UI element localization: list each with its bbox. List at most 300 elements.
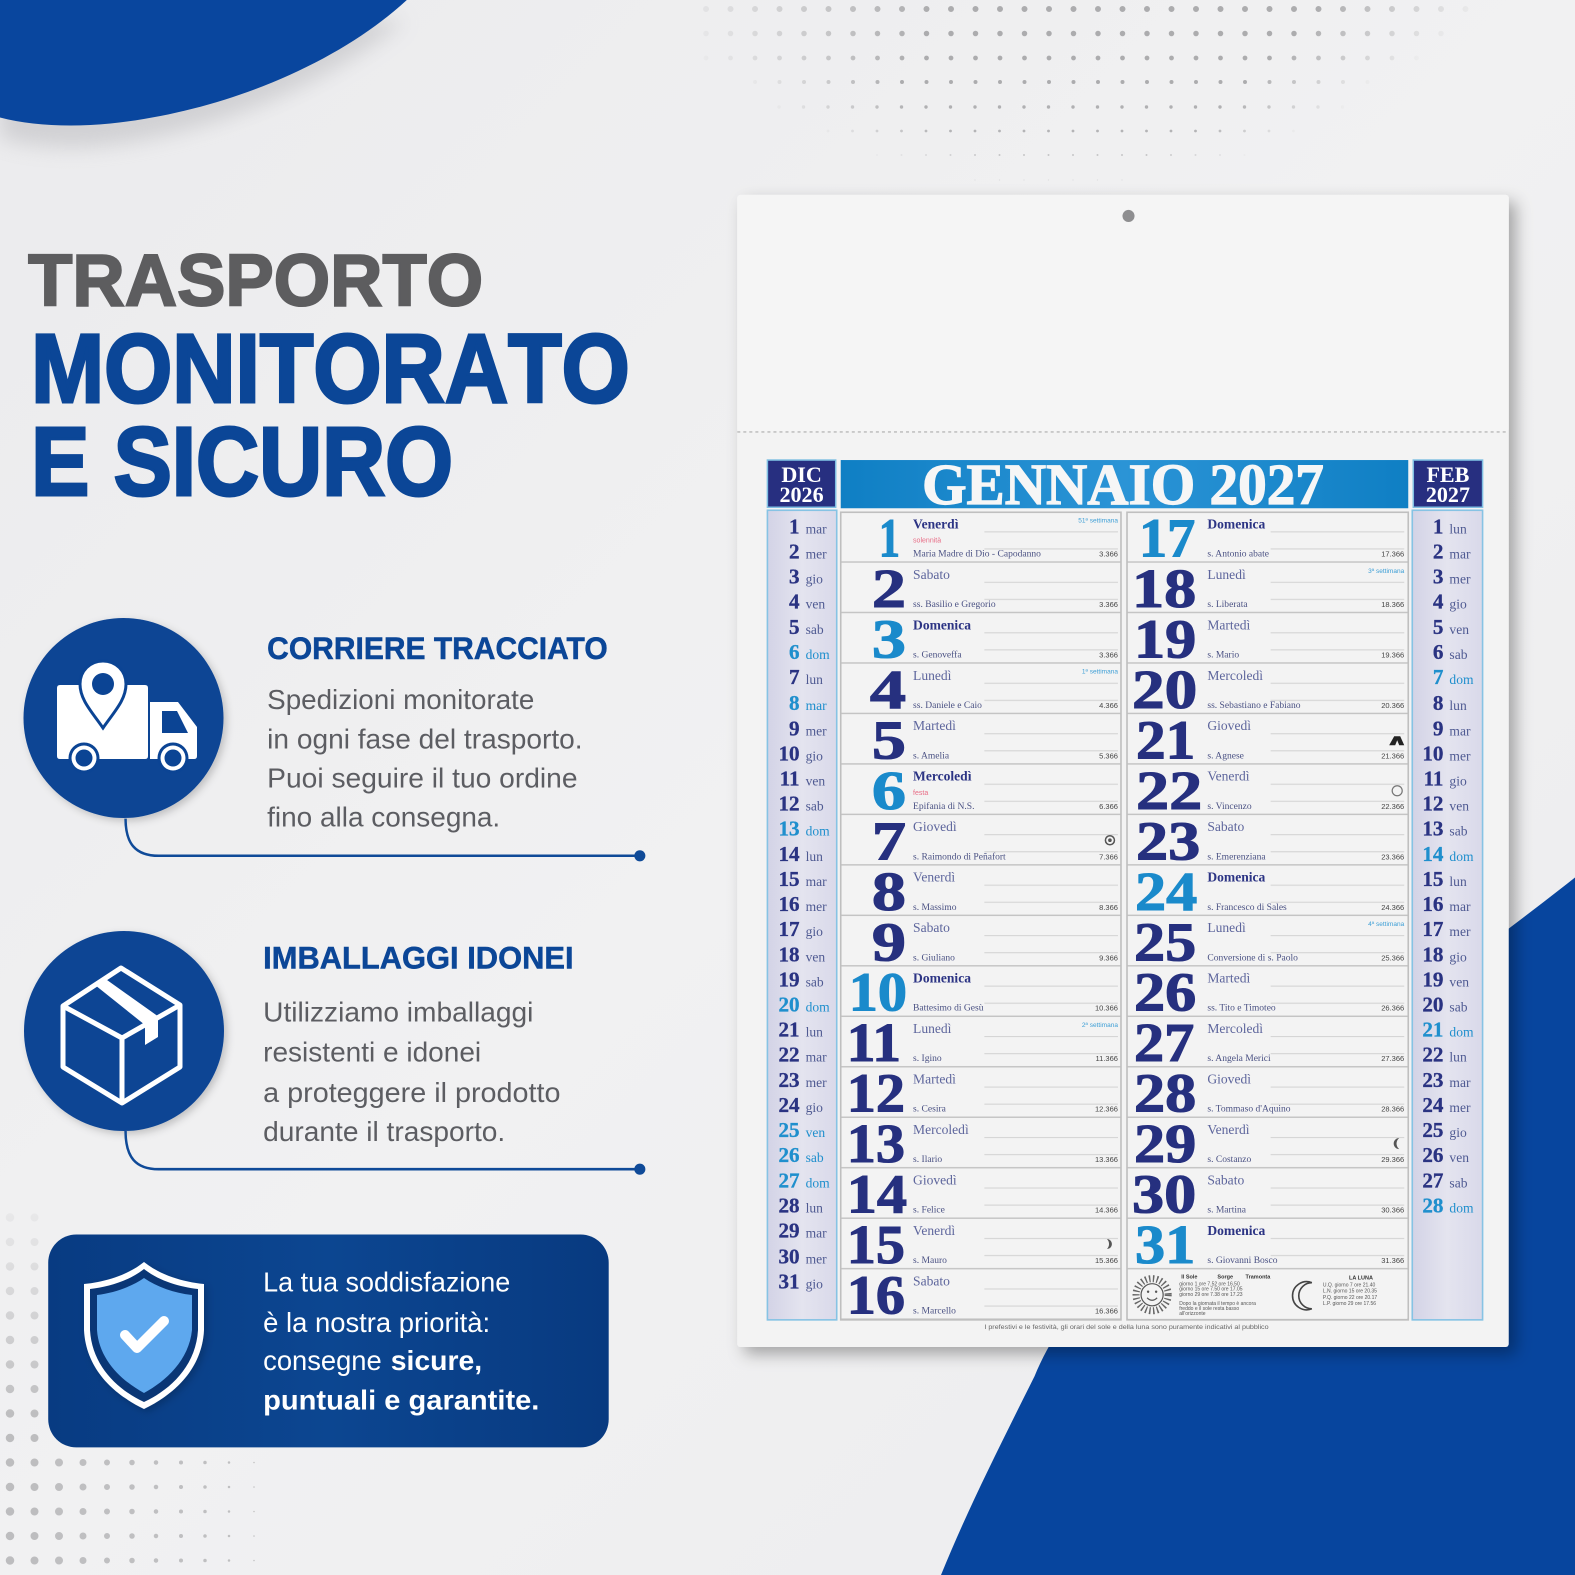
day column 17 to 31: Giovedì: [1207, 718, 1251, 733]
day column 17 to 31: 21.366: [1381, 751, 1404, 760]
day column 17 to 31: Mercoledì: [1207, 668, 1263, 683]
day column 1 to 16: 7: [872, 810, 906, 871]
text block: satisfaction message: è la nostra priorità:: [263, 1307, 490, 1338]
day column 1 to 16: s. Cesira: [913, 1104, 947, 1115]
sidebar: february 2027: 7: [1433, 665, 1444, 689]
sidebar: february 2027: ven: [1449, 622, 1469, 637]
day column 1 to 16: Lunedì: [913, 668, 952, 683]
text block: satisfaction message: sicure,: [391, 1345, 482, 1376]
sidebar: december 2026: 5: [789, 615, 800, 639]
day column 17 to 31: Martedì: [1207, 971, 1250, 986]
sun table: Dopo la giornata il tempo è ancora: [1179, 1301, 1256, 1307]
day column 17 to 31: Venerdì: [1207, 1122, 1250, 1137]
day column 17 to 31: [1127, 507, 1408, 1320]
day column 17 to 31: 26.366: [1381, 1004, 1404, 1013]
sidebar: february 2027: 1: [1433, 514, 1443, 538]
icon: truck with location pin: [24, 618, 224, 818]
connector line 1: [126, 819, 645, 861]
day column 17 to 31: Conversione di s. Paolo: [1207, 952, 1298, 963]
day column 1 to 16: s. Raimondo di Peñafort: [913, 851, 1006, 862]
sidebar: december 2026: ven: [806, 1125, 825, 1140]
sidebar: december 2026: sab: [806, 622, 824, 637]
day column 17 to 31: Lunedì: [1207, 567, 1246, 582]
sidebar: december 2026: 12: [778, 792, 800, 816]
sidebar: february 2027: sab: [1449, 1175, 1468, 1190]
sidebar: february 2027: dom: [1449, 1200, 1474, 1215]
sidebar: december 2026: mer: [806, 723, 827, 738]
sidebar: december 2026: 3: [789, 565, 800, 589]
text block: corriere tracciato: Puoi seguire il tuo ordine: [267, 762, 578, 793]
title: TRASPORTO: [28, 239, 483, 321]
day column 17 to 31: s. Emerenziana: [1207, 851, 1266, 862]
day column 1 to 16: 1ª settimana: [1082, 669, 1118, 676]
sidebar: february 2027: mar: [1449, 1075, 1471, 1090]
day column 1 to 16: 7.366: [1099, 852, 1118, 861]
day column 17 to 31: 18: [1132, 558, 1196, 619]
sidebar: february 2027: sab: [1449, 999, 1468, 1014]
day column 17 to 31: 20.366: [1381, 701, 1404, 710]
sidebar: february 2027: mar: [1449, 546, 1471, 561]
sidebar: december 2026: ven: [806, 773, 825, 788]
sidebar: february 2027: ven: [1449, 1150, 1469, 1165]
previous month label: 2026: [779, 482, 824, 507]
day column 1 to 16: Venerdì: [913, 516, 959, 531]
sidebar: february 2027: 22: [1422, 1043, 1443, 1067]
day column 17 to 31: 3ª settimana: [1368, 568, 1405, 575]
day column 1 to 16: 12: [847, 1063, 905, 1124]
day column 1 to 16: Battesimo di Gesù: [913, 1003, 984, 1014]
sidebar: february 2027: lun: [1449, 874, 1467, 889]
moon table: LA LUNA: [1349, 1276, 1373, 1282]
sidebar: december 2026: 20: [778, 992, 800, 1016]
sun table: Sorge: [1217, 1275, 1233, 1281]
sidebar: february 2027: dom: [1449, 672, 1474, 687]
panel: satisfaction callout: [48, 1234, 609, 1447]
sidebar: february 2027: mer: [1449, 1100, 1471, 1115]
day column 1 to 16: Mercoledì: [913, 1122, 969, 1137]
moon table: P.Q. giorno 22 ore 20.17: [1323, 1295, 1377, 1301]
day column 17 to 31: Mercoledì: [1207, 1021, 1263, 1036]
sidebar: february 2027: 21: [1422, 1018, 1443, 1042]
day column 1 to 16: 2: [872, 558, 906, 619]
moon table: U.Q. giorno 7 ore 21.40: [1323, 1283, 1376, 1289]
sidebar: december 2026: mar: [806, 1050, 827, 1065]
day column 17 to 31: 24.366: [1381, 903, 1404, 912]
day column 1 to 16: s. Marcello: [913, 1306, 956, 1317]
sidebar: february 2027: 4: [1433, 590, 1444, 614]
sidebar: december 2026: mar: [806, 874, 827, 889]
sidebar: december 2026: 13: [778, 817, 800, 841]
day column 1 to 16: Giovedì: [913, 819, 957, 834]
sidebar: february 2027: ven: [1449, 974, 1469, 989]
sidebar: december 2026: [767, 510, 837, 1320]
title: MONITORATO: [31, 314, 630, 423]
day column 17 to 31: 4ª settimana: [1368, 921, 1405, 928]
icon: shield with check: [84, 1262, 204, 1409]
sidebar: february 2027: sab: [1449, 824, 1468, 839]
day column 1 to 16: s. Ilario: [913, 1154, 942, 1165]
day column 17 to 31: 23: [1136, 810, 1200, 871]
sidebar: december 2026: 11: [780, 766, 800, 790]
day column 17 to 31: Martedì: [1207, 617, 1250, 632]
day column 1 to 16: Venerdì: [913, 1223, 955, 1238]
day column 1 to 16: s. Massimo: [913, 902, 957, 913]
day column 17 to 31: 22: [1136, 760, 1202, 821]
day column 1 to 16: Lunedì: [913, 1021, 952, 1036]
title: [28, 239, 630, 516]
sidebar: december 2026: 18: [778, 942, 800, 966]
day column 17 to 31: 28: [1134, 1063, 1196, 1124]
day column 1 to 16: solennità: [913, 537, 941, 544]
day column 17 to 31: 31: [1135, 1214, 1195, 1275]
day column 17 to 31: 30.366: [1381, 1206, 1404, 1215]
day column 17 to 31: s. Vincenzo: [1207, 801, 1252, 812]
halftone dots top right: [706, 9, 1470, 180]
sidebar: february 2027: 24: [1422, 1093, 1444, 1117]
sidebar: december 2026: gio: [806, 924, 823, 939]
day column 1 to 16: 16: [847, 1265, 905, 1326]
day column 17 to 31: 20: [1132, 659, 1197, 720]
sidebar: december 2026: 14: [778, 842, 800, 866]
day column 17 to 31: Domenica: [1207, 870, 1266, 885]
text block: imballaggi idonei: resistenti e idonei: [263, 1037, 481, 1068]
day column 17 to 31: 30: [1132, 1164, 1196, 1225]
day column 17 to 31: s. Martina: [1207, 1205, 1247, 1216]
day column 17 to 31: s. Antonio abate: [1207, 548, 1269, 559]
text block: imballaggi idonei: Utilizziamo imballaggi: [263, 997, 533, 1028]
sidebar: february 2027: 25: [1422, 1118, 1443, 1142]
icon: parcel box: [24, 931, 224, 1131]
sidebar: february 2027: 14: [1422, 842, 1444, 866]
title: E SICURO: [31, 407, 453, 516]
sidebar: february 2027: lun: [1449, 521, 1467, 536]
text block: imballaggi idonei: a proteggere il prodotto: [263, 1077, 560, 1108]
sidebar: december 2026: ven: [806, 597, 825, 612]
sidebar: february 2027: 11: [1423, 766, 1443, 790]
day column 17 to 31: 29.366: [1381, 1155, 1404, 1164]
sidebar: december 2026: dom: [806, 999, 830, 1014]
day column 17 to 31: Sabato: [1207, 819, 1244, 834]
text block: corriere tracciato: Spedizioni monitorate: [267, 684, 534, 715]
sidebar: february 2027: 23: [1422, 1068, 1443, 1092]
sidebar: december 2026: gio: [806, 1277, 823, 1292]
day column 1 to 16: 13.366: [1095, 1155, 1118, 1164]
sidebar: december 2026: 6: [789, 640, 800, 664]
sidebar: february 2027: mer: [1449, 924, 1471, 939]
day column 1 to 16: s. Giuliano: [913, 952, 955, 963]
sidebar: december 2026: mer: [806, 1075, 827, 1090]
moon table: L.N. giorno 15 ore 20.35: [1323, 1289, 1377, 1295]
sidebar: december 2026: 2: [789, 539, 800, 563]
sidebar: december 2026: 27: [778, 1168, 800, 1192]
sidebar: february 2027: mar: [1449, 899, 1471, 914]
heading: imballaggi idonei: IMBALLAGGI IDONEI: [263, 940, 574, 975]
day column 1 to 16: 1: [879, 507, 900, 568]
sidebar: december 2026: mer: [806, 1252, 827, 1267]
sidebar: december 2026: mer: [806, 546, 827, 561]
sidebar: december 2026: sab: [806, 974, 824, 989]
sidebar: february 2027: 18: [1422, 942, 1443, 966]
sidebar: december 2026: 7: [789, 665, 800, 689]
day column 1 to 16: 6.366: [1099, 802, 1118, 811]
sidebar: december 2026: 8: [789, 691, 800, 715]
day column 17 to 31: 18.366: [1381, 600, 1404, 609]
day column 1 to 16: 14: [847, 1164, 907, 1225]
day column 1 to 16: Martedì: [913, 1072, 956, 1087]
text block: satisfaction message: [263, 1267, 539, 1415]
day column 17 to 31: Sabato: [1207, 1173, 1244, 1188]
day column 1 to 16: Mercoledì: [913, 769, 972, 784]
day column 1 to 16: 5: [872, 709, 906, 770]
sidebar: february 2027: 6: [1433, 640, 1443, 664]
sidebar: february 2027: gio: [1449, 597, 1467, 612]
day column 17 to 31: 19.366: [1381, 650, 1404, 659]
day column 17 to 31: 23.366: [1381, 852, 1404, 861]
text block: imballaggi idonei: [263, 997, 560, 1147]
sidebar: february 2027: [1412, 510, 1483, 1320]
day column 1 to 16: 8.366: [1099, 903, 1118, 912]
sidebar: december 2026: 26: [778, 1143, 800, 1167]
text block: corriere tracciato: in ogni fase del trasporto.: [267, 723, 583, 754]
sidebar: february 2027: dom: [1449, 849, 1474, 864]
sidebar: december 2026: gio: [806, 1100, 823, 1115]
day column 1 to 16: Epifania di N.S.: [913, 801, 974, 812]
sidebar: december 2026: 29: [778, 1218, 800, 1242]
day column 1 to 16: 6: [872, 760, 906, 821]
text block: corriere tracciato: fino alla consegna.: [267, 802, 500, 833]
day column 1 to 16: 5.366: [1099, 751, 1118, 760]
day column 17 to 31: 22.366: [1381, 802, 1404, 811]
day column 1 to 16: s. Mauro: [913, 1255, 947, 1266]
sidebar: december 2026: 9: [789, 716, 800, 740]
sidebar: december 2026: 21: [778, 1018, 800, 1042]
decorative blue shape top left: [0, 0, 407, 126]
day column 1 to 16: festa: [913, 790, 928, 797]
next month label: 2027: [1426, 482, 1470, 507]
sidebar: february 2027: lun: [1449, 698, 1467, 713]
day column 1 to 16: 3.366: [1099, 600, 1118, 609]
sidebar: february 2027: 19: [1422, 967, 1443, 991]
day column 17 to 31: s. Costanzo: [1207, 1154, 1252, 1165]
text block: imballaggi idonei: durante il trasporto.: [263, 1116, 505, 1147]
day column 17 to 31: s. Tommaso d'Aquino: [1207, 1104, 1291, 1115]
sidebar: december 2026: 31: [778, 1270, 800, 1294]
sidebar: february 2027: 9: [1433, 716, 1443, 740]
day column 17 to 31: 27.366: [1381, 1054, 1404, 1063]
sidebar: february 2027: mer: [1449, 572, 1471, 587]
connector line 2: [126, 1131, 645, 1175]
sidebar: february 2027: gio: [1449, 773, 1467, 788]
day column 1 to 16: ss. Daniele e Caio: [913, 700, 982, 711]
day column 17 to 31: 21: [1136, 709, 1195, 770]
next month label: FEB: [1426, 462, 1470, 487]
day column 1 to 16: Martedì: [913, 718, 956, 733]
sidebar: february 2027: 26: [1422, 1143, 1443, 1167]
day column 17 to 31: 25.366: [1381, 953, 1404, 962]
day column 1 to 16: Venerdì: [913, 870, 955, 885]
sidebar: december 2026: 23: [778, 1068, 800, 1092]
sidebar: december 2026: 24: [778, 1093, 800, 1117]
day column 17 to 31: 27: [1134, 1012, 1194, 1073]
sidebar: december 2026: gio: [806, 572, 823, 587]
sidebar: december 2026: 19: [778, 967, 800, 991]
calendar footer note: I prefestivi e le festività, gli orari del sole e della luna sono puramente indicativi al pubblico: [984, 1325, 1269, 1331]
day column 1 to 16: 3: [872, 608, 906, 669]
sidebar: february 2027: 17: [1422, 917, 1444, 941]
sun table: all'orizzonte: [1179, 1311, 1206, 1317]
day column 1 to 16: 2ª settimana: [1082, 1022, 1118, 1029]
sun and moon almanac: [1128, 1270, 1407, 1319]
previous month label: DIC: [781, 462, 822, 487]
sidebar: february 2027: 13: [1422, 817, 1443, 841]
sidebar: december 2026: lun: [806, 672, 823, 687]
day column 1 to 16: Sabato: [913, 920, 950, 935]
day column 1 to 16: 15: [847, 1214, 905, 1275]
sun table: Il Sole: [1181, 1275, 1197, 1281]
day column 1 to 16: 11: [847, 1012, 901, 1073]
day column 17 to 31: s. Mario: [1207, 649, 1239, 660]
sidebar: december 2026: 17: [778, 917, 800, 941]
sidebar: december 2026: 22: [778, 1043, 800, 1067]
sidebar: december 2026: dom: [806, 647, 830, 662]
day column 1 to 16: s. Genoveffa: [913, 649, 962, 660]
calendar title bar: GENNAIO 2027: [922, 452, 1324, 517]
day column 17 to 31: s. Liberata: [1207, 599, 1248, 610]
day column 1 to 16: 10: [849, 962, 907, 1023]
sidebar: february 2027: 15: [1422, 867, 1443, 891]
day column 1 to 16: 9.366: [1099, 953, 1118, 962]
sidebar: february 2027: 10: [1422, 741, 1443, 765]
sidebar: february 2027: 8: [1433, 691, 1443, 715]
day column 1 to 16: s. Amelia: [913, 750, 950, 761]
sidebar: february 2027: 28: [1422, 1193, 1443, 1217]
next month label: [1413, 460, 1483, 507]
sidebar: february 2027: 5: [1433, 615, 1443, 639]
day column 17 to 31: 24: [1135, 861, 1197, 922]
decorative blue shape bottom right: [938, 872, 1575, 1575]
sidebar: february 2027: ven: [1449, 799, 1469, 814]
icon: sun: [1136, 1279, 1168, 1311]
day column 17 to 31: 19: [1134, 608, 1196, 669]
sidebar: february 2027: 2: [1433, 539, 1443, 563]
sidebar: february 2027: 12: [1422, 792, 1443, 816]
sidebar: december 2026: lun: [806, 1025, 823, 1040]
sidebar: december 2026: dom: [806, 824, 830, 839]
sidebar: december 2026: sab: [806, 799, 824, 814]
sidebar: december 2026: mar: [806, 521, 827, 536]
day column 1 to 16: s. Igino: [913, 1053, 942, 1064]
day column 17 to 31: 29: [1134, 1113, 1196, 1174]
day column 1 to 16: ss. Basilio e Gregorio: [913, 599, 996, 610]
day column 1 to 16: 4.366: [1099, 701, 1118, 710]
heading: corriere tracciato: CORRIERE TRACCIATO: [267, 631, 608, 666]
sidebar: february 2027: gio: [1449, 1125, 1467, 1140]
sidebar: december 2026: ven: [806, 949, 825, 964]
day column 17 to 31: s. Francesco di Sales: [1207, 902, 1287, 913]
moon table: [1323, 1276, 1377, 1307]
text block: corriere tracciato: [267, 684, 583, 833]
sidebar: february 2027: 16: [1422, 892, 1443, 916]
text block: satisfaction message: consegne: [263, 1345, 382, 1376]
day column 17 to 31: 31.366: [1381, 1256, 1404, 1265]
icon: moon: [1293, 1282, 1312, 1310]
day column 17 to 31: s. Giovanni Bosco: [1207, 1255, 1278, 1266]
sidebar: february 2027: 27: [1422, 1168, 1444, 1192]
halftone dots bottom left: [10, 1218, 254, 1561]
sidebar: december 2026: dom: [806, 1175, 830, 1190]
day column 17 to 31: 17: [1139, 507, 1195, 568]
panel: wall calendar: [737, 195, 1509, 1347]
sidebar: december 2026: sab: [806, 1150, 824, 1165]
day column 1 to 16: 10.366: [1095, 1004, 1118, 1013]
sidebar: december 2026: 1: [789, 514, 800, 538]
day column 1 to 16: Domenica: [913, 617, 971, 632]
day column 1 to 16: 13: [847, 1113, 905, 1174]
day column 1 to 16: 16.366: [1095, 1307, 1118, 1316]
sidebar: december 2026: lun: [806, 1200, 823, 1215]
sun table: giorno 29 ore 7.38 ore 17.23: [1179, 1292, 1243, 1298]
day column 17 to 31: Lunedì: [1207, 920, 1246, 935]
day column 17 to 31: Giovedì: [1207, 1072, 1251, 1087]
text block: satisfaction message: La tua soddisfazione: [263, 1267, 510, 1298]
day column 1 to 16: 14.366: [1095, 1206, 1118, 1215]
sidebar: december 2026: 10: [778, 741, 800, 765]
sidebar: december 2026: 30: [778, 1245, 800, 1269]
previous month label: [767, 460, 836, 507]
day column 1 to 16: Giovedì: [913, 1173, 957, 1188]
day column 1 to 16: 3.366: [1099, 650, 1118, 659]
day column 1 to 16: Sabato: [913, 567, 950, 582]
day column 1 to 16: 51ª settimana: [1078, 517, 1118, 524]
sun table: giorno 1 ore 7.52 ore 16.50: [1179, 1282, 1240, 1288]
day column 17 to 31: Venerdì: [1207, 769, 1250, 784]
day column 17 to 31: Domenica: [1207, 516, 1266, 531]
day column 17 to 31: s. Agnese: [1207, 750, 1244, 761]
sidebar: february 2027: sab: [1449, 647, 1468, 662]
sidebar: february 2027: lun: [1449, 1050, 1467, 1065]
sidebar: february 2027: dom: [1449, 1025, 1474, 1040]
sidebar: february 2027: mar: [1449, 723, 1471, 738]
sidebar: december 2026: lun: [806, 849, 823, 864]
sidebar: december 2026: mar: [806, 698, 827, 713]
day column 17 to 31: 25: [1134, 911, 1196, 972]
sidebar: december 2026: 4: [789, 590, 800, 614]
day column 1 to 16: Domenica: [913, 971, 971, 986]
day column 1 to 16: Maria Madre di Dio - Capodanno: [913, 548, 1041, 559]
day column 1 to 16: 8: [872, 861, 906, 922]
sidebar: december 2026: 16: [778, 892, 800, 916]
day column 17 to 31: ss. Sebastiano e Fabiano: [1207, 700, 1301, 711]
sidebar: february 2027: 20: [1422, 992, 1443, 1016]
sidebar: february 2027: gio: [1449, 949, 1467, 964]
day column 1 to 16: Sabato: [913, 1273, 950, 1288]
text block: satisfaction message: puntuali e garantite.: [263, 1384, 539, 1415]
sidebar: december 2026: gio: [806, 748, 823, 763]
day column 17 to 31: Domenica: [1207, 1223, 1266, 1238]
day column 1 to 16: s. Felice: [913, 1205, 945, 1216]
sidebar: december 2026: mer: [806, 899, 827, 914]
day column 17 to 31: ss. Tito e Timoteo: [1207, 1003, 1276, 1014]
day column 1 to 16: [841, 507, 1121, 1326]
day column 1 to 16: 15.366: [1095, 1256, 1118, 1265]
sun table: giorno 15 ore 7.50 ore 17.05: [1179, 1287, 1243, 1293]
day column 17 to 31: 28.366: [1381, 1105, 1404, 1114]
sidebar: december 2026: 15: [778, 867, 800, 891]
sidebar: february 2027: 3: [1433, 565, 1443, 589]
day column 1 to 16: 3.366: [1099, 549, 1118, 558]
sun table: freddo e il sole resta basso: [1179, 1306, 1239, 1312]
day column 1 to 16: 4: [870, 659, 906, 720]
